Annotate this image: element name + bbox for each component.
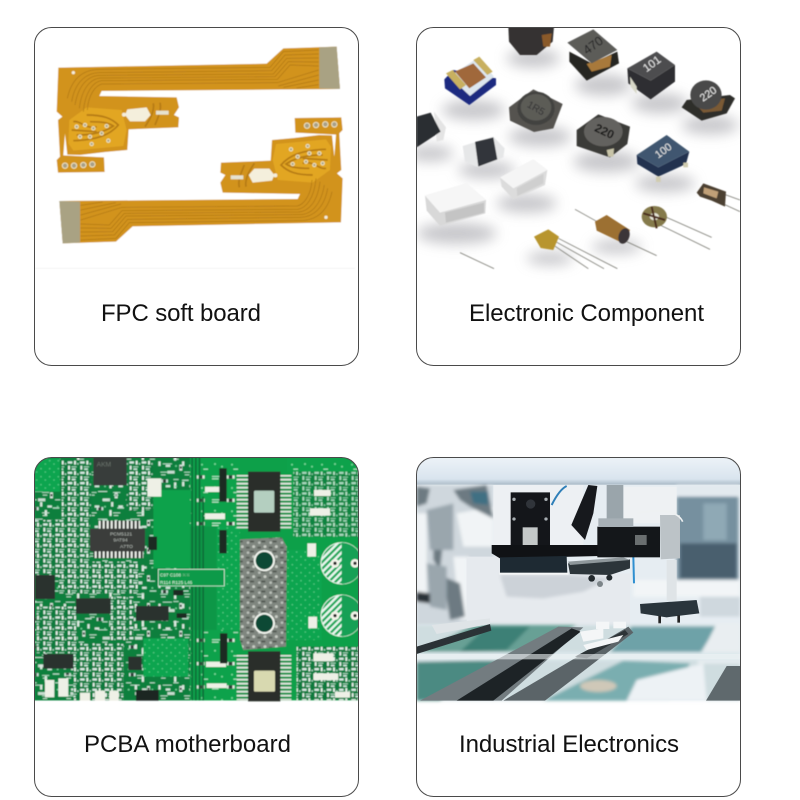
blurred background right [677,497,738,580]
white bar top [432,618,490,634]
dark left bar [417,624,491,654]
bright pad component [147,478,161,497]
white panel behind head [623,487,677,523]
dark chip at left [417,112,446,147]
IC: lower right QFP [237,651,291,701]
white machine column [467,557,630,625]
label: PCBA motherboard [84,731,291,758]
blue wound coil [444,57,496,105]
hatched capacitor footprints [321,543,362,636]
image: green printed circuit board [30,456,365,701]
inductor 100 [637,135,689,182]
panel: FPC soft board [30,20,365,366]
rail two [503,627,633,701]
lower carrier plate [568,557,630,587]
black cross plate [492,545,600,558]
IC: PCM5121 [90,521,145,558]
inductor 220 right [682,80,735,121]
IC: AKM chip: AKM [97,462,111,469]
white blocks on rail [580,622,626,650]
toroid coil [642,206,667,228]
white ceramic chip large [425,183,486,226]
dense white clusters [62,460,92,523]
bright plain green areas [35,458,60,492]
inductor 100: 100 [653,141,674,161]
blurred background left [417,485,493,625]
vertical shaft [607,485,623,519]
lower flexible circuit [59,117,343,243]
dark component rows [148,468,227,663]
silkscreen box [158,569,224,586]
panel: Electronic Component [407,20,745,366]
vertical traces [191,457,204,700]
inductor 101: 101 [641,54,663,75]
inductor 220 centre: 220 [592,121,617,142]
label: FPC soft board [101,300,261,327]
card border [34,458,358,796]
white ceramic chip small [500,160,548,196]
inductor 1R5: 1R5 [525,100,547,118]
blue pneumatic tubes [552,486,634,583]
inductor 101 [627,52,675,99]
IC: PCM5121: 9AT94 [113,538,128,544]
chip with dark band [463,137,505,167]
pale reflection band [417,654,740,659]
rail one [420,627,583,701]
image: automated electronics assembly line [410,457,745,701]
lower conveyor and glass boards [417,623,740,701]
card border [416,458,740,796]
top inductor [508,27,554,55]
inductor 220 right: 220 [698,84,719,104]
IC: PCM5121: PCM5121 [110,531,132,537]
IC: AKM chip [93,456,127,485]
image: assorted inductors and chip components [407,20,745,269]
inductor 470 [567,29,619,81]
yellow capacitor [534,229,559,250]
suction plate [640,600,699,623]
small ICs [35,575,169,701]
silkscreen box: R114 R125 L46 [160,580,193,585]
card border [416,28,740,366]
dark arm hose [571,485,597,540]
label: Industrial Electronics [459,731,679,758]
panel: PCBA motherboard [30,456,365,796]
inductor 220 centre [577,114,630,157]
metal shield patch with holes [240,537,287,650]
IC: upper right QFP [237,472,291,532]
IC: PCM5121: A7TO [120,544,133,550]
process head [597,518,660,557]
upper flexible circuit [57,47,340,173]
label: Electronic Component [469,300,704,327]
inductor 470: 470 [581,34,606,57]
component-dense left area [35,457,190,700]
card border [34,28,358,366]
camera mount [511,492,550,547]
right corner rails [706,666,740,701]
silkscreen box: C97 C108 ⁙⁙ [160,573,190,578]
small axial coil [697,183,726,207]
inductor 1R5 [509,89,563,132]
axial and radial leads [460,193,740,269]
copper coil [595,215,632,245]
panel: Industrial Electronics [410,457,745,796]
ring light cylinder [499,556,569,575]
soft shadows [407,49,738,265]
image: flexible printed circuit boards [56,46,344,244]
silver actuator arm [637,511,683,601]
top beam [410,457,745,485]
white passives [45,487,350,701]
